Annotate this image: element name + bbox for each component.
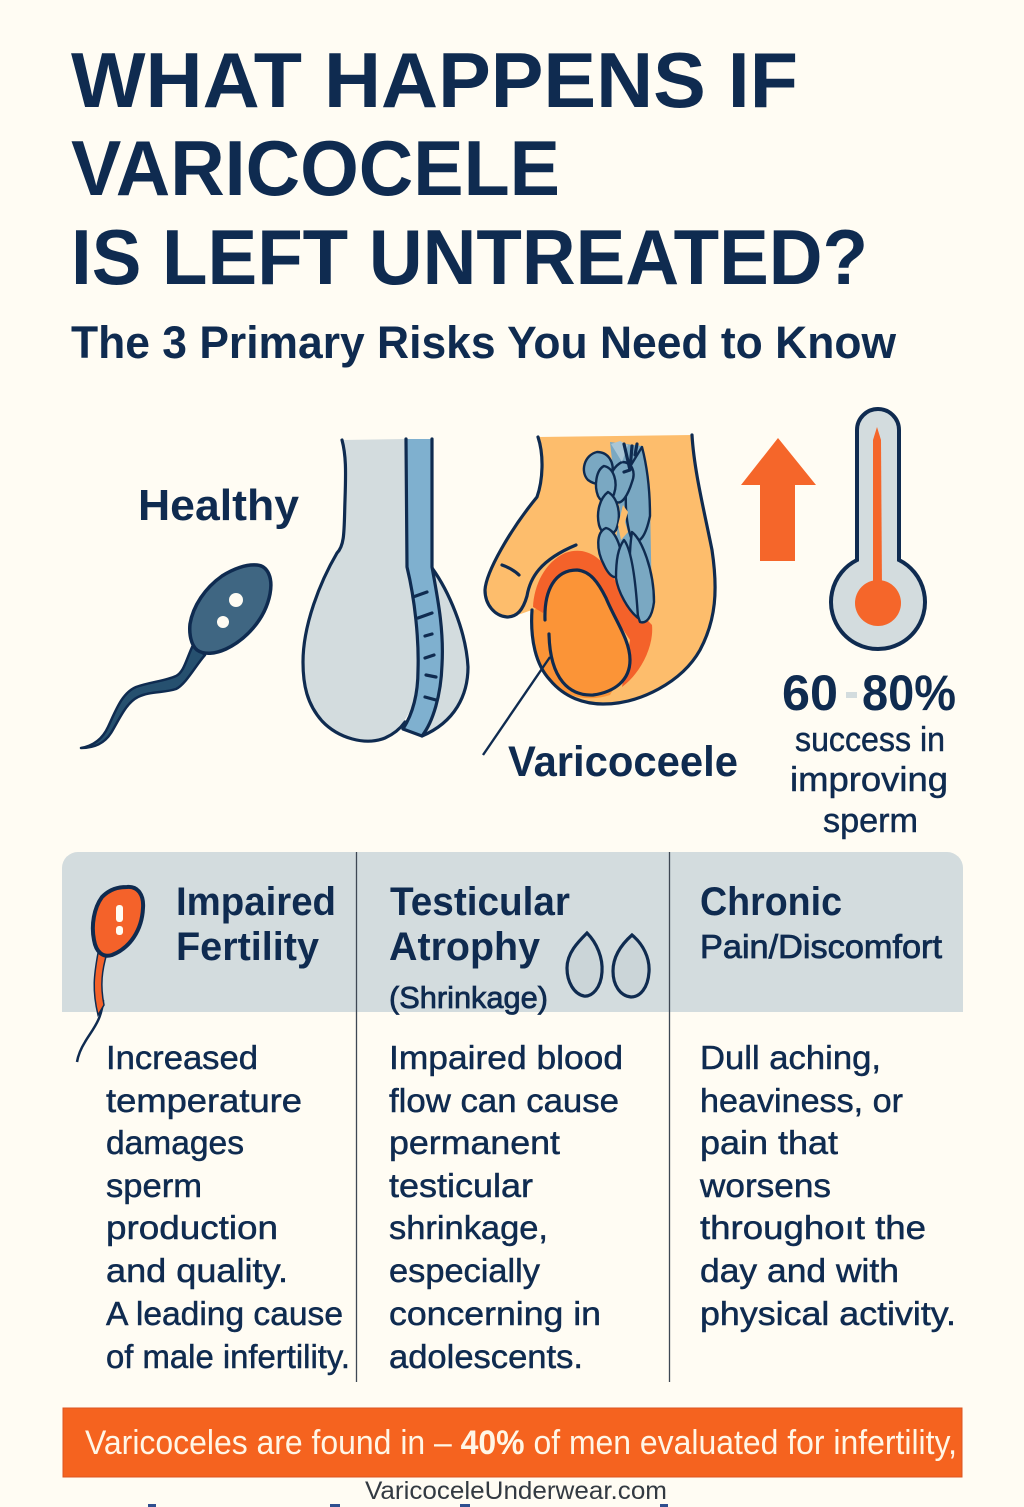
text: impaired fertility description: production	[106, 1209, 278, 1246]
icon: thermometer	[831, 409, 925, 649]
stat: success rate	[782, 665, 956, 840]
heading: impaired fertility: Fertility	[176, 925, 320, 969]
text: testicular atrophy description: shrinkage,	[389, 1209, 548, 1246]
heading: chronic pain	[700, 880, 942, 965]
text: testicular atrophy description: flow can cause	[389, 1082, 619, 1119]
stat: success rate: 80%	[862, 665, 956, 721]
text: chronic pain description: pain that	[700, 1124, 838, 1161]
text: chronic pain description: Dull aching,	[700, 1039, 881, 1076]
stat: success rate: success in	[795, 721, 945, 759]
title: WHAT HAPPENS IF	[71, 36, 798, 124]
column dividers	[356, 852, 670, 1382]
text: impaired fertility description: Increased	[106, 1039, 258, 1076]
icon: healthy sperm	[81, 565, 271, 748]
heading: impaired fertility	[176, 880, 336, 969]
icon: damaged sperm	[77, 887, 143, 1062]
illustration: varicocele	[483, 435, 715, 755]
veins	[584, 441, 654, 622]
illustration: healthy testicle	[303, 439, 468, 741]
text: impaired fertility description: sperm	[106, 1167, 202, 1204]
text: chronic pain description: physical activity.	[700, 1295, 956, 1332]
text: chronic pain description: heaviness, or	[700, 1082, 903, 1119]
label: healthy: Healthy	[138, 481, 300, 530]
text: chronic pain description	[699, 1039, 956, 1332]
heading: testicular atrophy: Testicular	[390, 880, 570, 924]
text: testicular atrophy description: Impaired blood	[389, 1039, 623, 1076]
text: impaired fertility description: A leading cause	[106, 1295, 343, 1332]
text: chronic pain description: day and with	[700, 1252, 899, 1289]
text: testicular atrophy description: permanent	[389, 1124, 560, 1161]
title: IS LEFT UNTREATED?	[71, 213, 868, 301]
heading: testicular atrophy	[389, 880, 570, 1015]
title: VARICOCELE	[71, 124, 560, 212]
callout banner	[63, 1408, 962, 1477]
callout banner: Varicoceles are found in – 40% of men evaluated for infertility,	[85, 1424, 957, 1462]
stat: success rate: 60	[782, 665, 838, 721]
text: testicular atrophy description: especially	[389, 1252, 541, 1289]
heading: chronic pain: Pain/Discomfort	[700, 928, 942, 965]
text: impaired fertility description: and quality.	[106, 1252, 288, 1289]
text: impaired fertility description	[106, 1039, 350, 1375]
text: testicular atrophy description	[389, 1039, 623, 1375]
heading: testicular atrophy: (Shrinkage)	[389, 980, 548, 1015]
icon: heat up arrow	[741, 438, 816, 561]
text: impaired fertility description: temperature	[106, 1082, 302, 1119]
footer url: VaricoceleUnderwear.com	[365, 1477, 667, 1505]
subtitle: The 3 Primary Risks You Need to Know	[71, 317, 897, 368]
stat: success rate: sperm	[823, 802, 918, 840]
text: chronic pain description: worsens	[699, 1167, 831, 1204]
text: chronic pain description: throughoıt the	[700, 1209, 926, 1246]
label: varicocele: Varicoceele	[508, 738, 738, 786]
text: testicular atrophy description: testicular	[389, 1167, 533, 1204]
heading: impaired fertility: Impaired	[176, 880, 336, 924]
text: testicular atrophy description: concerning in	[389, 1295, 601, 1332]
text: impaired fertility description: of male infertility.	[106, 1338, 350, 1375]
title	[71, 36, 868, 301]
stat: success rate: improving	[790, 761, 948, 799]
heading: chronic pain: Chronic	[700, 880, 842, 924]
icon: shrunken testicles	[567, 933, 649, 997]
text: impaired fertility description: damages	[106, 1124, 244, 1161]
panel: risk headers band	[62, 852, 963, 1012]
text: testicular atrophy description: adolescents.	[389, 1338, 583, 1375]
heading: testicular atrophy: Atrophy	[389, 925, 541, 969]
